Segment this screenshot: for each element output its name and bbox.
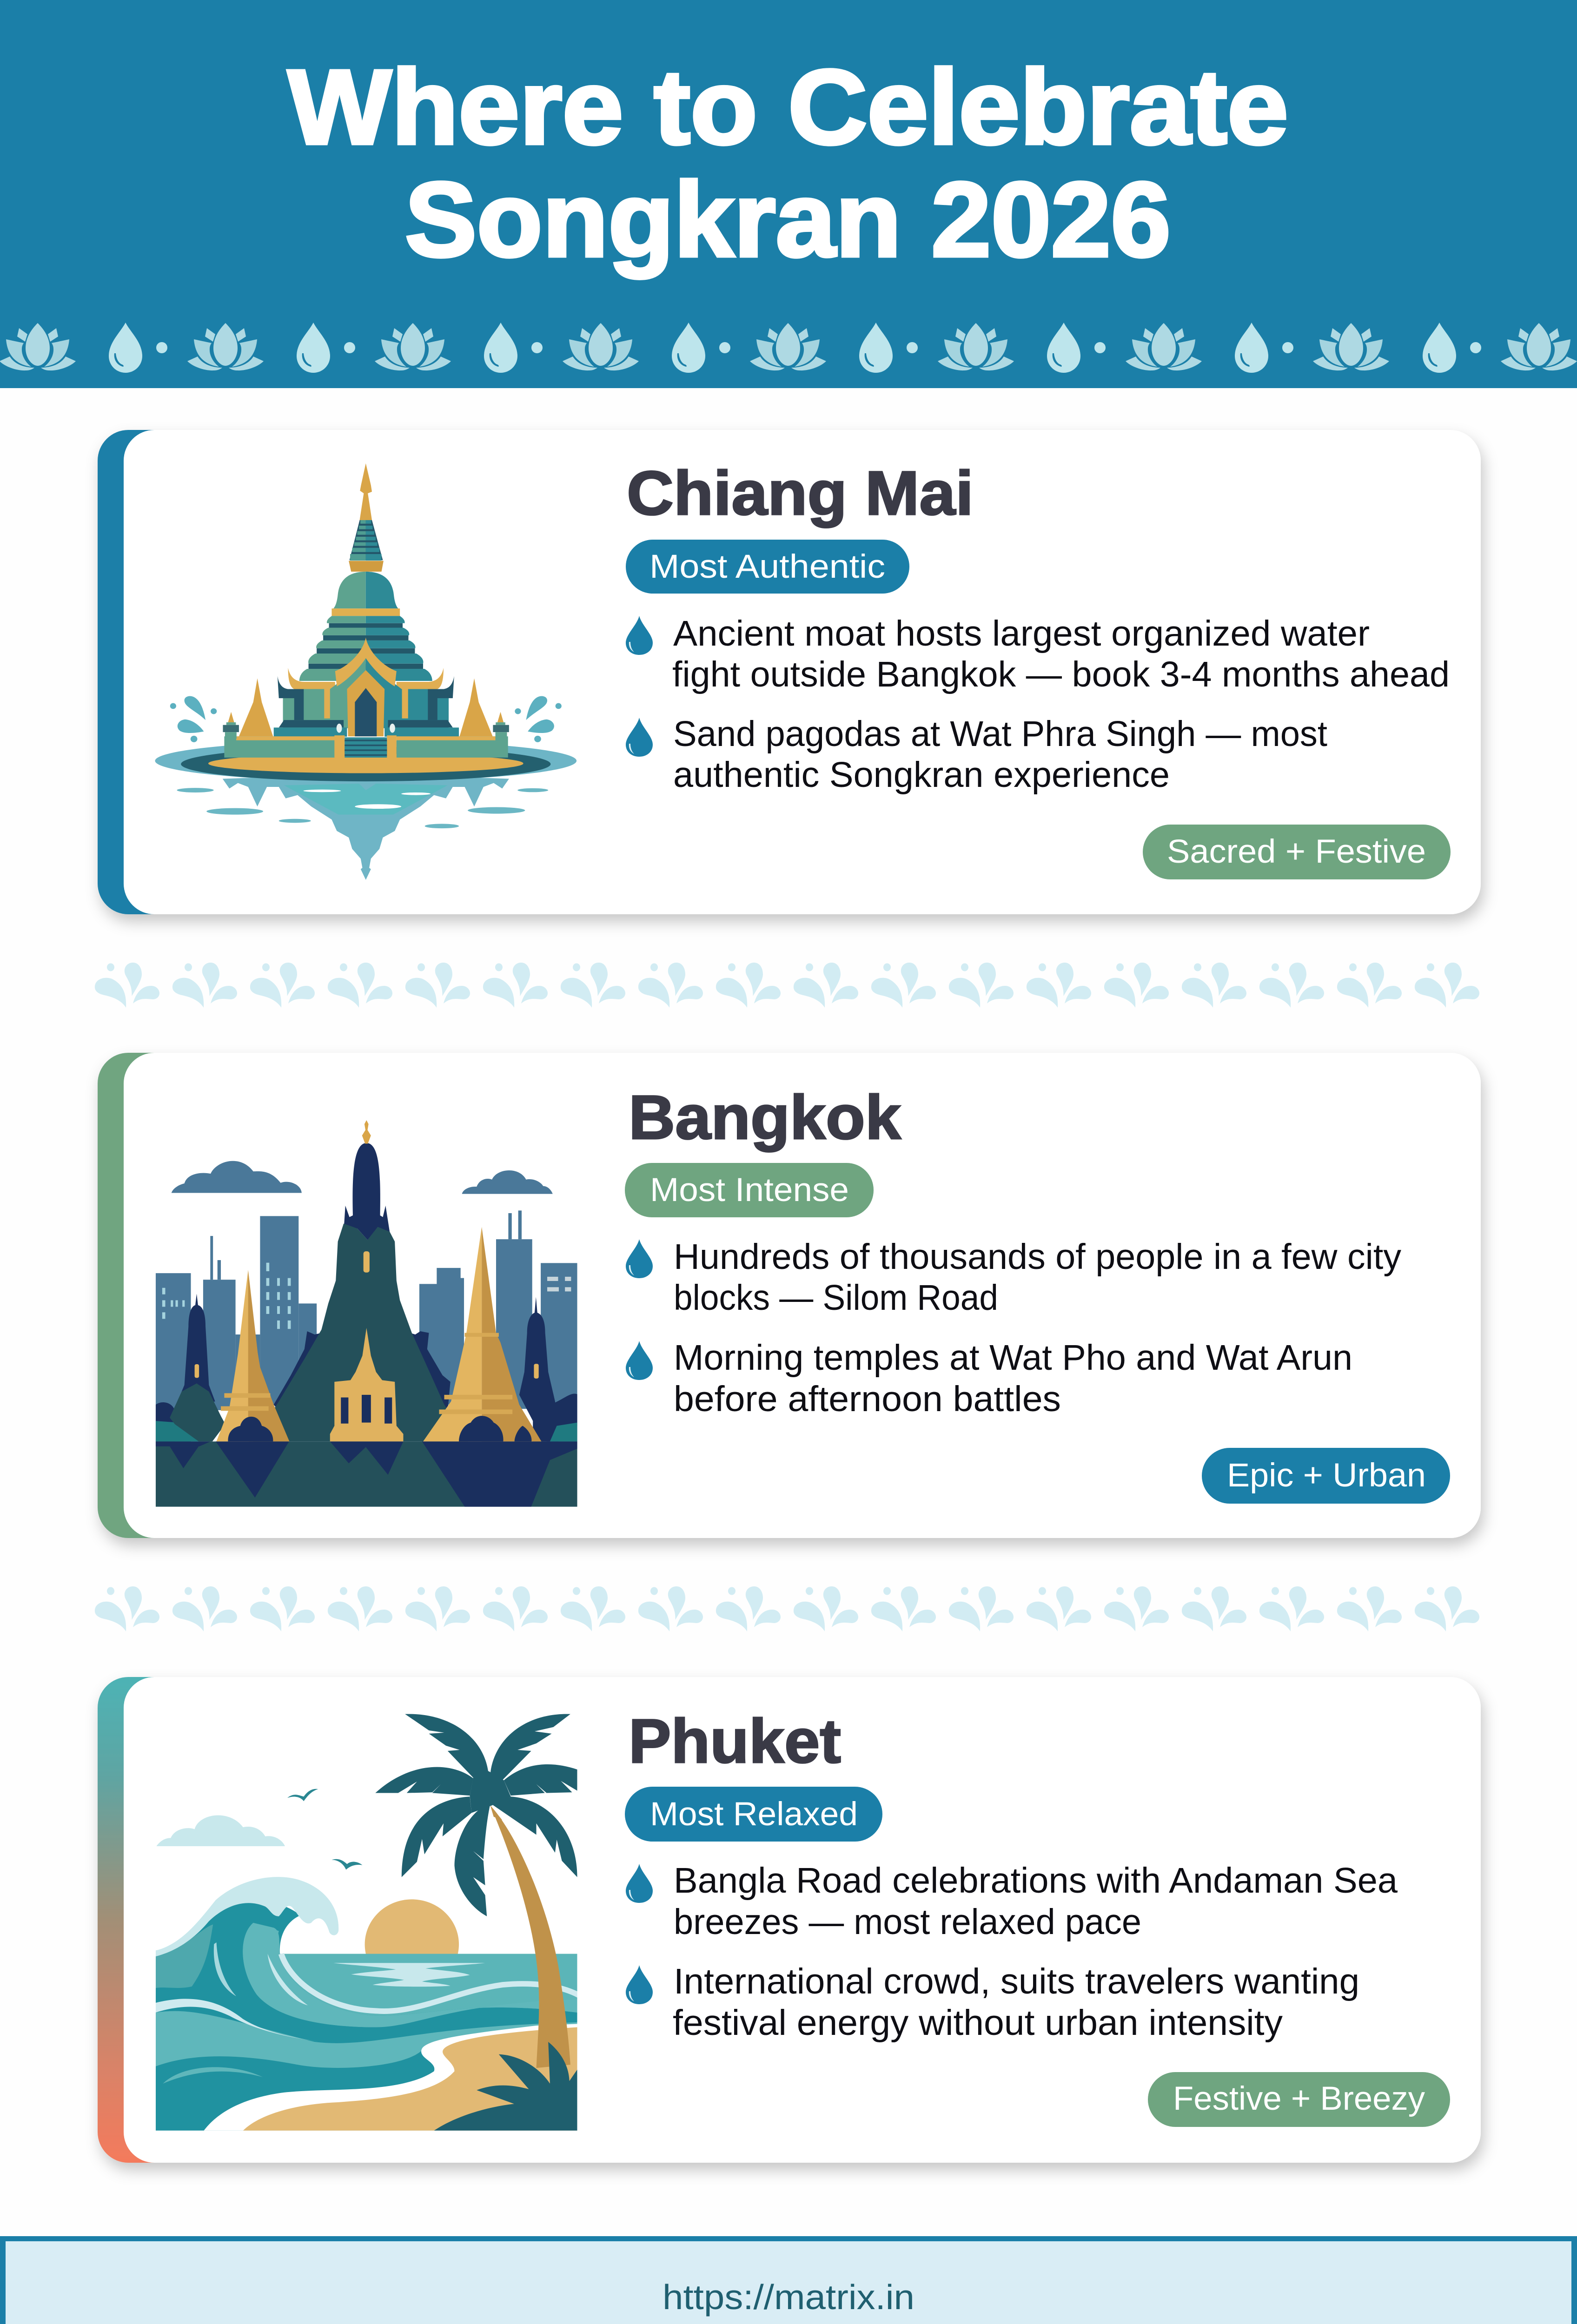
footer url: https://matrix.in [663, 2278, 914, 2317]
card body with gradient accent [98, 1677, 1481, 2163]
title: Songkran 2026 [405, 161, 1171, 279]
badge: Most Authentic: Most Authentic [649, 548, 885, 585]
illustration: Bangkok skyline and temples [156, 1120, 577, 1507]
bullet 2: Sand pagodas at Wat Phra Singh — most [673, 714, 1327, 754]
tag: Festive + Breezy: Festive + Breezy [1173, 2080, 1425, 2117]
bullet 2: Morning temples at Wat Pho and Wat Arun [674, 1338, 1352, 1378]
card body with blue accent [98, 430, 1481, 914]
tag: Epic + Urban [1202, 1448, 1450, 1504]
title [288, 48, 1288, 279]
tag: Festive + Breezy [1148, 2072, 1450, 2127]
bullet 1 [626, 1861, 1398, 1942]
tag: Sacred + Festive [1143, 825, 1451, 879]
bullet 2: International crowd, suits travelers wanting [674, 1961, 1359, 2001]
bullet 2 [626, 1961, 1359, 2043]
tag: Epic + Urban: Epic + Urban [1227, 1457, 1426, 1494]
badge: Most Intense [625, 1163, 874, 1217]
bullet 1: Bangla Road celebrations with Andaman Sea [674, 1861, 1398, 1901]
badge: Most Relaxed: Most Relaxed [650, 1796, 858, 1833]
bullet 1: breezes — most relaxed pace [674, 1902, 1141, 1942]
bullet 1: fight outside Bangkok — book 3-4 months ahead [672, 654, 1450, 694]
title: Where to Celebrate [288, 48, 1288, 166]
bullet 1: Ancient moat hosts largest organized water [673, 614, 1370, 654]
illustration: beach wave and palm tree [156, 1714, 581, 2131]
bullet 1 [626, 614, 1450, 694]
heading: Phuket: Phuket [629, 1707, 841, 1776]
heading: Chiang Mai: Chiang Mai [627, 459, 974, 528]
panel: Bangkok [98, 1053, 1481, 1538]
bullet 1: Hundreds of thousands of people in a few city [674, 1237, 1401, 1277]
bullet 2: authentic Songkran experience [673, 755, 1170, 795]
panel: Phuket [98, 1677, 1481, 2163]
illustration: golden temple on water [155, 463, 576, 880]
footer bar [0, 2236, 1577, 2324]
bullet 2 [626, 714, 1327, 795]
bullet 2: festival energy without urban intensity [673, 2003, 1283, 2043]
bullet 2 [626, 1338, 1352, 1419]
card body with green accent [98, 1053, 1481, 1538]
badge: Most Intense: Most Intense [650, 1172, 849, 1208]
tag: Sacred + Festive: Sacred + Festive [1167, 833, 1426, 870]
badge: Most Authentic [626, 540, 909, 594]
panel: Chiang Mai [98, 430, 1481, 914]
splash divider 2 [95, 1586, 1479, 1631]
bullet 1: blocks — Silom Road [674, 1278, 998, 1318]
lotus and water drop border [0, 323, 1577, 373]
bullet 2: before afternoon battles [674, 1379, 1061, 1419]
badge: Most Relaxed [625, 1787, 882, 1842]
bullet 1 [626, 1237, 1401, 1318]
heading: Bangkok: Bangkok [629, 1083, 901, 1152]
header banner [0, 0, 1577, 388]
splash divider 1 [95, 963, 1479, 1008]
